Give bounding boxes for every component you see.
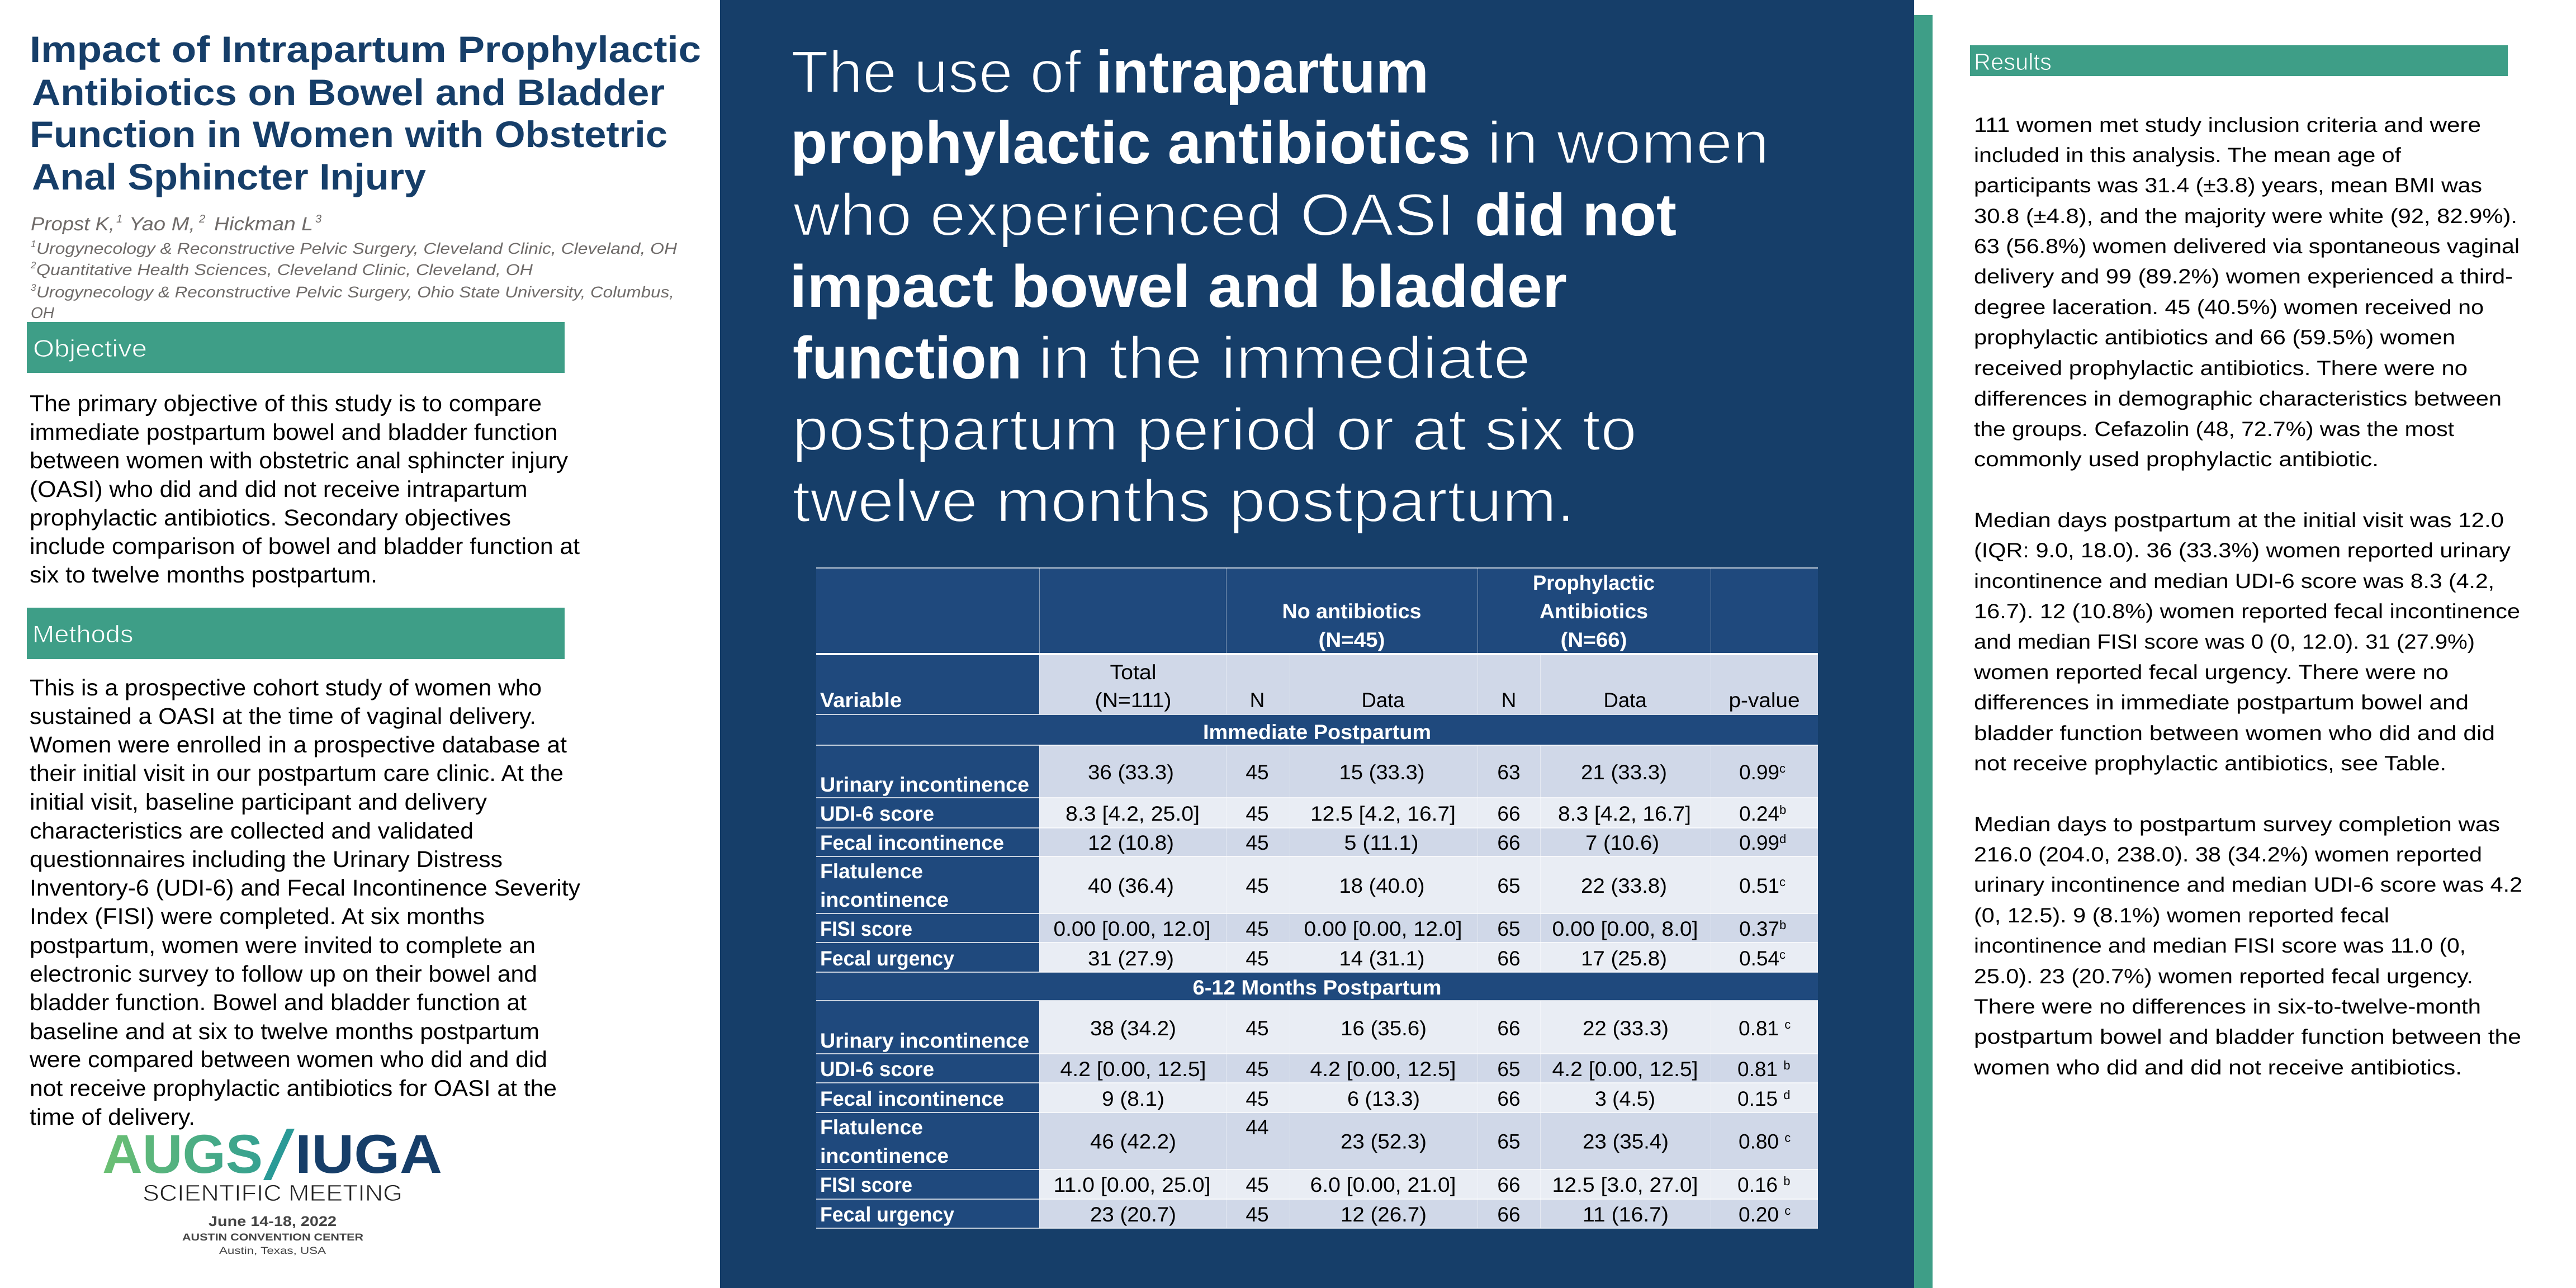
text: results paragraph 2: bladder function between women who did and did [1974, 722, 2495, 745]
row: fecal incontinence (6-12 months) [820, 1087, 1791, 1110]
text: results paragraph 1: included in this analysis. The mean age of [1974, 144, 2402, 167]
text: objective body: (OASI) who did and did not receive intrapartum [30, 476, 528, 502]
text: objective body: prophylactic antibiotics. Secondary objectives [30, 505, 511, 531]
text: methods body: Index (FISI) were completed. At six months [30, 903, 485, 929]
row: flatulence incontinence (6-12 months): 0.80 [1739, 1130, 1779, 1153]
row: fecal urgency (6-12 months): 45 [1246, 1203, 1269, 1226]
table header: column names: N [1502, 689, 1516, 712]
row: fecal urgency (immediate): 17 (25.8) [1581, 947, 1667, 970]
heading: results [1970, 45, 2508, 76]
row: fecal incontinence (immediate): 0.99 [1739, 831, 1779, 854]
row: urinary incontinence (immediate): 21 (33.3) [1581, 761, 1667, 784]
row: fecal urgency (6-12 months): 66 [1497, 1203, 1521, 1226]
row: fecal incontinence (6-12 months): d [1783, 1088, 1791, 1102]
row: urinary incontinence (6-12 months): 22 (33.3) [1583, 1017, 1669, 1040]
text: methods body: This is a prospective cohort study of women who [30, 675, 542, 700]
logo: AUGS/IUGA scientific meeting: IUGA [295, 1123, 442, 1185]
row: flatulence incontinence (immediate): incontinence [820, 888, 949, 911]
row: UDI-6 score (6-12 months): 4.2 [0.00, 12.5] [1552, 1058, 1698, 1081]
text: objective body: immediate postpartum bowel and bladder function [30, 419, 558, 445]
text: results paragraph 1: participants was 31.4 (±3.8) years, mean BMI was [1974, 174, 2482, 197]
row: fecal urgency (6-12 months): Fecal urgency [820, 1203, 954, 1226]
text: results paragraph 2: and median FISI score was 0 (0, 12.0). 31 (27.9%) [1974, 631, 2475, 653]
heading: methods: Methods [32, 621, 133, 648]
affiliations: 2 [30, 260, 36, 271]
authors: Yao M, [129, 214, 195, 235]
text: results paragraph 3: 25.0). 23 (20.7%) women reported fecal urgency. [1974, 965, 2473, 988]
row: fecal incontinence (immediate): 66 [1497, 831, 1521, 854]
text: results paragraph 2: 16.7). 12 (10.8%) women reported fecal incontinence [1974, 600, 2520, 623]
row: fecal urgency (immediate): 14 (31.1) [1339, 947, 1424, 970]
text: objective body [30, 390, 580, 588]
headline statement: twelve months postpartum. [792, 467, 1575, 534]
affiliations [30, 239, 678, 321]
row: flatulence incontinence (6-12 months): Flatulence [820, 1116, 923, 1139]
headline statement: impact bowel and bladder [789, 253, 1567, 320]
text: results paragraph 2: differences in immediate postpartum bowel and [1974, 691, 2469, 714]
text: methods body: postpartum, women were invited to complete an [30, 932, 536, 958]
text: results paragraph 1: prophylactic antibiotics and 66 (59.5%) women [1974, 326, 2455, 349]
text: objective body: The primary objective of this study is to compare [30, 390, 542, 416]
title: Impact of Intrapartum Prophylactic [30, 29, 701, 70]
row: flatulence incontinence (6-12 months): 23 (52.3) [1341, 1130, 1427, 1153]
row: fecal incontinence (immediate): 5 (11.1) [1344, 831, 1419, 854]
affiliations: 3 [31, 282, 36, 293]
text: results paragraph 1: differences in demographic characteristics between [1974, 387, 2502, 410]
table header: column names: Total [1110, 661, 1156, 684]
row: fecal incontinence (immediate) [820, 831, 1786, 854]
text: results paragraph 3: There were no differences in six-to-twelve-month [1974, 995, 2481, 1018]
text: results paragraph 3 [1973, 813, 2522, 1079]
text: methods body: time of delivery. [30, 1104, 195, 1130]
row: urinary incontinence (immediate): 0.99 [1739, 761, 1779, 784]
logo: AUGS/IUGA scientific meeting: SCIENTIFIC MEETING [143, 1180, 402, 1206]
row: fecal incontinence (6-12 months): 6 (13.3) [1347, 1087, 1420, 1110]
row: urinary incontinence (6-12 months): c [1784, 1017, 1791, 1031]
text: methods body: Women were enrolled in a prospective database at [30, 732, 567, 757]
title: Antibiotics on Bowel and Bladder [32, 72, 665, 113]
text: methods body: characteristics are collected and validated [30, 818, 473, 844]
text: methods body: questionnaires including the Urinary Distress [30, 846, 503, 872]
row: flatulence incontinence (immediate): 22 (33.8) [1581, 874, 1667, 897]
table header: column names: N [1250, 689, 1265, 712]
title [30, 29, 701, 197]
text: results paragraph 2: women reported fecal urgency. There were no [1973, 661, 2449, 684]
headline statement: postpartum period or at six to [792, 396, 1637, 463]
row: UDI-6 score (immediate): 12.5 [4.2, 16.7] [1310, 802, 1456, 825]
row: UDI-6 score (6-12 months) [820, 1058, 1791, 1081]
row: flatulence incontinence (6-12 months): 46 (42.2) [1090, 1130, 1176, 1153]
row: fecal urgency (6-12 months): 11 (16.7) [1583, 1203, 1669, 1226]
row: fecal urgency (immediate): 0.54 [1739, 947, 1779, 970]
row: fecal urgency (6-12 months): c [1784, 1204, 1791, 1218]
row: FISI score (6-12 months): 12.5 [3.0, 27.0] [1552, 1173, 1698, 1196]
text: results paragraph 3: 216.0 (204.0, 238.0). 38 (34.2%) women reported [1974, 843, 2482, 866]
panel: left column [27, 29, 701, 1256]
row: urinary incontinence (6-12 months): 0.81 [1739, 1017, 1779, 1040]
headline statement: prophylactic antibiotics [790, 109, 1471, 176]
row: flatulence incontinence (immediate): c [1779, 875, 1786, 889]
text: results paragraph 2: Median days postpartum at the initial visit was 12.0 [1974, 509, 2504, 532]
section band: 6-12 months postpartum: 6-12 Months Postpartum [1193, 976, 1441, 999]
text: methods body: baseline and at six to twelve months postpartum [30, 1019, 539, 1044]
row: FISI score (6-12 months): 11.0 [0.00, 25.0] [1053, 1173, 1211, 1196]
row: flatulence incontinence (6-12 months): c [1784, 1130, 1791, 1145]
row: fecal urgency (6-12 months) [820, 1203, 1791, 1226]
headline statement: in the immediate [1038, 324, 1531, 391]
logo: AUGS/IUGA scientific meeting [102, 1123, 442, 1256]
authors: Propst K, [31, 214, 115, 235]
row: flatulence incontinence (6-12 months): incontinence [820, 1144, 949, 1167]
table header: group columns [1282, 571, 1655, 651]
row: FISI score (6-12 months) [820, 1173, 1791, 1196]
row: FISI score (immediate): 0.00 [0.00, 8.0] [1552, 917, 1698, 940]
row: UDI-6 score (6-12 months): UDI-6 score [820, 1058, 934, 1081]
text: results paragraph 1: the groups. Cefazolin (48, 72.7%) was the most [1974, 418, 2455, 441]
row fills [816, 567, 1818, 1229]
row: UDI-6 score (immediate): UDI-6 score [820, 802, 934, 825]
row: urinary incontinence (immediate): Urinary incontinence [820, 773, 1029, 796]
text: results paragraph 1: degree laceration. 45 (40.5%) women received no [1974, 296, 2484, 319]
row: UDI-6 score (immediate): 8.3 [4.2, 25.0] [1066, 802, 1200, 825]
text: objective body: include comparison of bowel and bladder function at [30, 533, 580, 559]
row: flatulence incontinence (immediate): Flatulence [820, 860, 923, 883]
row: fecal incontinence (6-12 months): 45 [1246, 1087, 1269, 1110]
affiliations: 1 [31, 239, 36, 249]
row: fecal urgency (6-12 months): 23 (20.7) [1090, 1203, 1176, 1226]
row: urinary incontinence (immediate): 63 [1497, 761, 1521, 784]
text: results paragraph 1 [1974, 113, 2520, 471]
text: results paragraph 3: Median days to postpartum survey completion was [1974, 813, 2500, 836]
row: flatulence incontinence (immediate): 65 [1497, 874, 1521, 897]
row: FISI score (immediate): 45 [1246, 917, 1269, 940]
row: UDI-6 score (immediate): 45 [1246, 802, 1269, 825]
row: urinary incontinence (immediate): 15 (33.3) [1339, 761, 1424, 784]
row: fecal incontinence (6-12 months): 3 (4.5) [1595, 1087, 1655, 1110]
authors: Hickman L [214, 214, 313, 235]
row: UDI-6 score (immediate): b [1779, 803, 1786, 817]
headline statement: The use of [791, 38, 1081, 105]
headline statement: in women [1487, 109, 1769, 176]
row: urinary incontinence (6-12 months) [820, 1017, 1791, 1052]
logo: AUGS/IUGA scientific meeting: June 14-18, 2022 [209, 1214, 337, 1229]
text: results paragraph 3: incontinence and median FISI score was 11.0 (0, [1974, 934, 2466, 957]
row: UDI-6 score (6-12 months): 4.2 [0.00, 12.5] [1310, 1058, 1456, 1081]
row: FISI score (6-12 months): FISI score [820, 1173, 912, 1196]
text: objective body: six to twelve months postpartum. [30, 562, 377, 588]
affiliations: OH [31, 304, 55, 321]
row: fecal urgency (immediate): 66 [1497, 947, 1521, 970]
headline statement: who experienced OASI [793, 181, 1455, 248]
row: fecal incontinence (immediate): 7 (10.6) [1585, 831, 1659, 854]
text: results paragraph 2 [1973, 509, 2520, 775]
row: FISI score (immediate): 65 [1497, 917, 1521, 940]
logo: AUGS/IUGA scientific meeting: AUSTIN CONVENTION CENTER [182, 1232, 363, 1243]
text: methods body: Inventory-6 (UDI-6) and Fecal Incontinence Severity [30, 875, 581, 901]
row: fecal urgency (6-12 months): 12 (26.7) [1341, 1203, 1427, 1226]
section band: immediate postpartum: Immediate Postpartum [1203, 721, 1431, 744]
panel: center navy [720, 0, 1914, 1288]
table header: group columns: Prophylactic [1533, 571, 1655, 594]
text: methods body: sustained a OASI at the time of vaginal delivery. [30, 703, 536, 729]
row: flatulence incontinence (6-12 months) [820, 1116, 1791, 1167]
authors: 2 [198, 213, 205, 225]
row: urinary incontinence (immediate): 36 (33.3) [1088, 761, 1174, 784]
row: fecal incontinence (immediate): Fecal incontinence [820, 831, 1004, 854]
authors [31, 213, 321, 235]
headline statement: function [793, 324, 1022, 391]
row: flatulence incontinence (immediate) [820, 860, 1786, 911]
table header: group columns: No antibiotics [1282, 600, 1421, 623]
headline statement: intrapartum [1096, 38, 1429, 105]
row: FISI score (immediate) [820, 917, 1786, 940]
row: UDI-6 score (6-12 months): b [1783, 1058, 1791, 1072]
text: methods body [29, 675, 581, 1130]
row: FISI score (immediate): FISI score [820, 917, 912, 940]
text: methods body: were compared between women who did and did [29, 1046, 547, 1072]
row: flatulence incontinence (6-12 months): 23 (35.4) [1583, 1130, 1669, 1153]
logo: AUGS/IUGA scientific meeting: Austin, Texas, USA [219, 1245, 326, 1256]
text: methods body: bladder function. Bowel and bladder function at [30, 989, 527, 1015]
row: urinary incontinence (6-12 months): Urinary incontinence [820, 1029, 1029, 1052]
text: results paragraph 1: 30.8 (±4.8), and the majority were white (92, 82.9%). [1974, 205, 2517, 228]
row: UDI-6 score (immediate): 66 [1497, 802, 1521, 825]
text: results paragraph 1: commonly used prophylactic antibiotic. [1974, 448, 2379, 471]
row: flatulence incontinence (6-12 months): 65 [1497, 1130, 1521, 1153]
text: results paragraph 3: women who did and did not receive antibiotics. [1973, 1056, 2462, 1079]
row: FISI score (6-12 months): 6.0 [0.00, 21.0] [1310, 1173, 1456, 1196]
row: UDI-6 score (6-12 months): 65 [1497, 1058, 1521, 1081]
row: fecal incontinence (immediate): 12 (10.8) [1088, 831, 1174, 854]
row: fecal urgency (immediate): c [1779, 948, 1786, 962]
row: fecal urgency (immediate): 45 [1246, 947, 1269, 970]
text: results paragraph 2: not receive prophylactic antibiotics, see Table. [1974, 752, 2446, 775]
row: UDI-6 score (6-12 months): 45 [1246, 1058, 1269, 1081]
row: UDI-6 score (immediate): 0.24 [1739, 802, 1779, 825]
row: FISI score (6-12 months): 45 [1246, 1173, 1269, 1196]
row: UDI-6 score (6-12 months): 4.2 [0.00, 12.5] [1060, 1058, 1206, 1081]
text: results paragraph 1: 111 women met study inclusion criteria and were [1974, 113, 2481, 136]
title: Anal Sphincter Injury [32, 156, 426, 197]
authors: 3 [315, 213, 321, 225]
text: results paragraph 1: delivery and 99 (89.2%) women experienced a third- [1974, 265, 2513, 288]
row: flatulence incontinence (immediate): 0.51 [1739, 874, 1779, 897]
row: FISI score (immediate): b [1779, 918, 1786, 932]
row: fecal urgency (6-12 months): 0.20 [1739, 1203, 1779, 1226]
text: methods body: not receive prophylactic antibiotics for OASI at the [30, 1076, 557, 1101]
text: results paragraph 1: received prophylactic antibiotics. There were no [1974, 357, 2468, 380]
table header: column names: Data [1603, 689, 1647, 712]
row: fecal urgency (immediate): 31 (27.9) [1088, 947, 1174, 970]
table header: group columns: (N=45) [1318, 628, 1385, 651]
text: methods body: initial visit, baseline participant and delivery [30, 789, 487, 815]
table header: group columns: (N=66) [1561, 628, 1627, 651]
row: fecal incontinence (6-12 months): 0.15 [1737, 1087, 1778, 1110]
affiliations: Quantitative Health Sciences, Cleveland Clinic, Cleveland, OH [36, 261, 533, 278]
row: urinary incontinence (immediate) [820, 761, 1786, 796]
text: results paragraph 1: 63 (56.8%) women delivered via spontaneous vaginal [1974, 235, 2520, 258]
text: objective body: between women with obstetric anal sphincter injury [30, 447, 569, 473]
row: flatulence incontinence (6-12 months): 44 [1246, 1116, 1269, 1139]
text: methods body: their initial visit in our postpartum care clinic. At the [30, 760, 564, 786]
row: FISI score (immediate): 0.37 [1739, 917, 1779, 940]
row: urinary incontinence (6-12 months): 66 [1497, 1017, 1521, 1040]
teal side stripe [1914, 15, 1933, 1288]
table header: column names: Variable [820, 689, 902, 712]
text: results paragraph 2: incontinence and median UDI-6 score was 8.3 (4.2, [1974, 570, 2494, 593]
affiliations: Urogynecology & Reconstructive Pelvic Surgery, Ohio State University, Columbus, [36, 283, 674, 301]
text: results paragraph 3: urinary incontinence and median UDI-6 score was 4.2 [1974, 873, 2522, 896]
row: UDI-6 score (immediate) [820, 802, 1786, 825]
row: fecal urgency (immediate) [820, 947, 1786, 970]
row: FISI score (immediate): 0.00 [0.00, 12.0] [1053, 917, 1211, 940]
heading: objective [27, 322, 565, 373]
table header: column names: p-value [1729, 689, 1800, 712]
row: fecal incontinence (immediate): d [1779, 832, 1786, 846]
row: fecal incontinence (6-12 months): 9 (8.1) [1102, 1087, 1164, 1110]
logo: AUGS/IUGA scientific meeting: AUGS [102, 1123, 263, 1185]
headline statement: did not [1475, 181, 1677, 248]
title: Function in Women with Obstetric [30, 113, 667, 155]
row: fecal incontinence (6-12 months): 66 [1497, 1087, 1521, 1110]
row: UDI-6 score (6-12 months): 0.81 [1737, 1058, 1778, 1081]
heading: objective: Objective [33, 335, 147, 362]
row: FISI score (6-12 months): 66 [1497, 1173, 1521, 1196]
row: urinary incontinence (6-12 months): 45 [1246, 1017, 1269, 1040]
text: results paragraph 3: postpartum bowel and bladder function between the [1974, 1025, 2521, 1048]
row: urinary incontinence (immediate): 45 [1246, 761, 1269, 784]
affiliations: Urogynecology & Reconstructive Pelvic Surgery, Cleveland Clinic, Cleveland, OH [36, 240, 678, 257]
text: methods body: electronic survey to follow up on their bowel and [30, 961, 537, 987]
heading: results: Results [1974, 49, 2052, 75]
text: results paragraph 3: (0, 12.5). 9 (8.1%) women reported fecal [1974, 904, 2389, 927]
row: flatulence incontinence (immediate): 45 [1246, 874, 1269, 897]
headline statement [789, 38, 1769, 534]
row: fecal urgency (immediate): Fecal urgency [820, 947, 954, 970]
table header: column names: (N=111) [1095, 689, 1172, 712]
panel: results [1970, 45, 2522, 1079]
table header: group columns: Antibiotics [1540, 600, 1648, 623]
table: outcomes by antibiotic group [816, 567, 1818, 1229]
table header: column names: Data [1362, 689, 1405, 712]
row: fecal incontinence (immediate): 45 [1246, 831, 1269, 854]
authors: 1 [116, 213, 122, 225]
row: flatulence incontinence (immediate): 18 (40.0) [1339, 874, 1424, 897]
row: FISI score (6-12 months): 0.16 [1737, 1173, 1778, 1196]
heading: methods [27, 608, 565, 659]
row: urinary incontinence (6-12 months): 16 (35.6) [1341, 1017, 1427, 1040]
text: results paragraph 2: (IQR: 9.0, 18.0). 36 (33.3%) women reported urinary [1974, 539, 2511, 562]
table header: column names [820, 661, 1800, 712]
row: FISI score (immediate): 0.00 [0.00, 12.0] [1304, 917, 1462, 940]
row: FISI score (6-12 months): b [1783, 1174, 1791, 1188]
row: UDI-6 score (immediate): 8.3 [4.2, 16.7] [1558, 802, 1691, 825]
row: fecal incontinence (6-12 months): Fecal incontinence [820, 1087, 1004, 1110]
row: urinary incontinence (immediate): c [1779, 761, 1786, 775]
row: flatulence incontinence (immediate): 40 (36.4) [1088, 874, 1174, 897]
row: urinary incontinence (6-12 months): 38 (34.2) [1090, 1017, 1176, 1040]
